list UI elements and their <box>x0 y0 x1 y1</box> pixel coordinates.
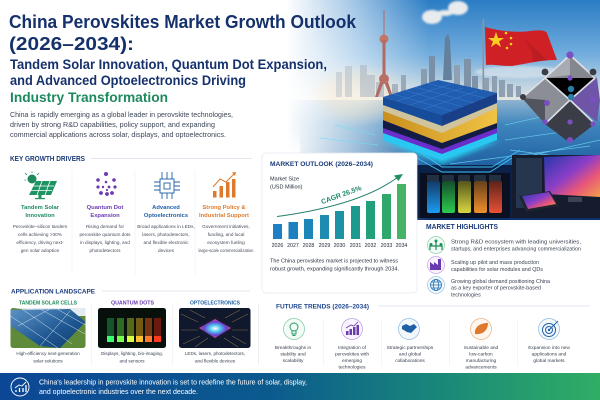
bar chart: 2028 <box>303 243 314 249</box>
footer message: and optoelectronic industries over the next decade. <box>39 387 198 396</box>
trend: integration: emerging <box>342 358 362 364</box>
driver: advanced optoelectronics: devices <box>158 248 175 253</box>
neon water lines <box>320 116 600 164</box>
icon: factory <box>428 256 444 274</box>
driver: strong policy and industrial support: Strong Policy & <box>202 205 246 211</box>
driver: tandem solar innovation: cells achieving >30% <box>18 232 62 237</box>
subheads: OPTOELECTRONICS <box>190 300 241 306</box>
image: optoelectronic chip <box>179 308 250 348</box>
subheads <box>19 300 241 306</box>
heading: market outlook: MARKET OUTLOOK (2026–2034) <box>270 161 373 168</box>
driver: quantum dot expansion: in displays, lighting, and <box>80 240 130 245</box>
footer message <box>39 378 307 396</box>
trend: stability: Breakthroughs in <box>275 345 311 351</box>
panel: key growth drivers <box>10 156 254 275</box>
driver: advanced optoelectronics: Advanced <box>152 205 180 211</box>
highlight: global demand: as a key exporter of perovskite-based <box>451 286 541 292</box>
highlight: scaling up: Scaling up pilot and mass production <box>451 260 539 266</box>
trend: partnerships: and global <box>399 352 421 358</box>
trend: stability <box>275 345 311 364</box>
driver: tandem solar innovation: gen solar adoption <box>21 248 60 253</box>
intro text <box>10 110 233 139</box>
intro text: driven by strong R&D capabilities, policy support, and expanding <box>10 120 215 129</box>
caption: solar <box>16 351 80 364</box>
heading: future trends: FUTURE TRENDS (2026–2034) <box>276 304 369 310</box>
trend: partnerships: Strategic partnerships <box>387 345 434 351</box>
driver: strong policy and industrial support: Government initiatives, <box>202 224 250 229</box>
driver: strong policy and industrial support: Industrial Support <box>199 213 249 219</box>
trend: sustainable <box>464 345 499 370</box>
heading: key growth drivers: KEY GROWTH DRIVERS <box>10 156 85 163</box>
bar chart: 2029 <box>319 243 330 249</box>
trend: expansion: global markets <box>533 358 565 364</box>
footer message: China's leadership in perovskite innovation is set to redefine the future of solar, display, <box>39 378 307 386</box>
icon: quantum dots <box>96 172 117 196</box>
trend: expansion: Expansion into new <box>528 345 570 351</box>
highlight: global demand <box>451 279 550 298</box>
highlight: scaling up: capabilities for solar modules and QDs <box>451 267 543 273</box>
highlight: global demand: technologies <box>451 292 481 298</box>
driver: strong policy and industrial support: large-scale commercialization <box>198 248 254 253</box>
dark neon panel <box>417 165 600 218</box>
driver: strong policy and industrial support <box>198 205 254 253</box>
bar chart: 2030 <box>334 243 345 249</box>
caption: quantum dots <box>101 351 163 364</box>
driver: advanced optoelectronics: Broad applications in LEDs, <box>137 224 195 229</box>
icon: target <box>538 318 560 340</box>
arrow: cagr growth curve <box>277 174 403 216</box>
icon: oriental pearl tower <box>375 10 393 97</box>
trend: expansion: applications and <box>532 352 567 358</box>
trend: integration: Integration of <box>338 345 367 351</box>
icon: light bulb <box>284 318 304 340</box>
bar chart: 2034 <box>396 243 407 249</box>
driver: quantum dot expansion: Rising demand for <box>86 224 124 229</box>
bar chart: 2033 <box>381 243 392 249</box>
trend: partnerships: collaborations <box>395 358 425 364</box>
icon: growth circle <box>11 378 29 396</box>
panel: glowing vials <box>420 173 510 218</box>
trend: sustainable: low-carbon <box>469 352 493 358</box>
driver: advanced optoelectronics <box>137 205 195 253</box>
intro text: China is rapidly emerging as a global leader in perovskite technologies, <box>10 110 233 119</box>
title <box>9 12 357 105</box>
highlight: r&d ecosystem <box>451 240 581 252</box>
trend: integration: technologies <box>339 364 366 370</box>
panel: application landscape <box>10 288 250 365</box>
icon: clouds <box>422 1 565 78</box>
intro text: commercial applications across solar, displays, and optoelectronics. <box>10 130 226 139</box>
driver: tandem solar innovation: Innovation <box>25 213 55 219</box>
highlight: r&d ecosystem: Strong R&D ecosystem with leading universities, <box>451 240 581 246</box>
heading: application landscape: APPLICATION LANDSCAPE <box>11 288 95 296</box>
image: quantum dot vials <box>98 308 166 348</box>
subheads: TANDEM SOLAR CELLS <box>19 300 78 306</box>
trend: sustainable: advancements <box>465 364 497 370</box>
highlight: scaling up <box>451 260 543 273</box>
axis title: (USD Million) <box>270 184 303 190</box>
title: Industry Transformation <box>10 90 168 105</box>
driver: strong policy and industrial support: funding, and local <box>208 232 244 237</box>
trend: expansion <box>528 345 570 364</box>
trend: integration <box>335 345 369 370</box>
icon: rising bars <box>213 172 236 198</box>
driver: strong policy and industrial support: ecosystem fueling <box>207 240 245 245</box>
icon: handshake <box>398 318 420 340</box>
icon: globe <box>428 276 444 294</box>
trend: sustainable: Sustainable and <box>464 345 499 351</box>
driver: quantum dot expansion: Quantum Dot <box>87 205 123 211</box>
caption: quantum dots: Displays, lighting, bio-imaging, <box>101 351 163 356</box>
panel: market outlook <box>262 153 417 293</box>
driver: advanced optoelectronics: Optoelectronics <box>144 213 188 219</box>
driver: tandem solar innovation: Perovskite–silicon tandem <box>13 224 67 229</box>
panel: future trends <box>258 303 590 370</box>
driver: advanced optoelectronics: and flexible electronic <box>143 240 189 245</box>
label: cagr: CAGR 26.5% <box>320 185 363 206</box>
driver: quantum dot expansion: photodetectors <box>89 248 121 253</box>
outlook note: robust growth, expanding significantly through 2034. <box>270 266 399 272</box>
driver: quantum dot expansion: Expansion <box>90 213 120 219</box>
driver: advanced optoelectronics: lasers, photodetectors, <box>142 232 190 237</box>
icon: leaf <box>470 318 492 340</box>
skyline buildings <box>336 34 521 97</box>
icon: people network <box>428 236 444 254</box>
caption: solar: solar solutions <box>33 358 63 364</box>
highlight: global demand: Growing global demand positioning China <box>451 279 550 285</box>
caption: optoelectronics <box>185 351 245 364</box>
bar chart: 2031 <box>350 243 361 249</box>
footer banner <box>0 373 600 400</box>
title: China Perovskites Market Growth Outlook <box>9 12 357 32</box>
axis title <box>270 176 303 190</box>
title: Tandem Solar Innovation, Quantum Dot Expansion, <box>10 57 327 72</box>
trend: stability: scalability <box>283 358 304 364</box>
trend: partnerships <box>387 345 434 364</box>
outlook note <box>270 258 399 272</box>
title: (2026–2034): <box>9 34 134 54</box>
heading: market highlights: MARKET HIGHLIGHTS <box>426 222 498 231</box>
caption: solar: High-efficiency next-generation <box>16 351 80 356</box>
bar chart: 2032 <box>365 243 376 249</box>
driver: quantum dot expansion: perovskite quantum dots <box>79 232 131 237</box>
panel: monitor and tablet <box>512 155 600 218</box>
caption: optoelectronics: and flexible devices <box>195 358 236 364</box>
driver: tandem solar innovation: Tandem Solar <box>21 205 60 211</box>
icon: chinese flag <box>482 19 557 91</box>
icon: growth chart <box>342 318 362 340</box>
driver: tandem solar innovation: efficiency, driving next- <box>16 240 64 245</box>
axis title: Market Size <box>270 176 299 182</box>
icon: perovskite crystal <box>520 51 600 143</box>
icon: chip <box>154 172 180 199</box>
bar chart <box>272 184 407 249</box>
driver: tandem solar innovation <box>13 205 67 253</box>
caption: quantum dots: and sensors <box>119 358 145 364</box>
neon frame <box>417 150 520 172</box>
outlook note: The China perovskites market is projected to witness <box>270 258 398 264</box>
driver: quantum dot expansion <box>79 205 131 253</box>
subheads: QUANTUM DOTS <box>111 300 155 306</box>
trend: integration: perovskites with <box>335 352 369 358</box>
bar chart: 2026 <box>272 243 283 249</box>
solar layer stack <box>380 80 502 164</box>
icon: solar panel <box>24 172 57 199</box>
highlight: r&d ecosystem: startups, and enterprises advancing commercialization <box>451 246 581 252</box>
title: and Advanced Optoelectronics Driving <box>10 73 246 88</box>
panel: market highlights <box>426 222 581 298</box>
image: solar panels <box>10 308 86 348</box>
bar chart: 2027 <box>287 243 299 249</box>
hero image: skyline, solar stack, flag and crystal <box>250 0 600 230</box>
trend: stability: stability and <box>280 352 306 358</box>
trend: sustainable: manufacturing <box>466 358 497 364</box>
caption: optoelectronics: LEDs, lasers, photodetectors, <box>185 351 245 356</box>
